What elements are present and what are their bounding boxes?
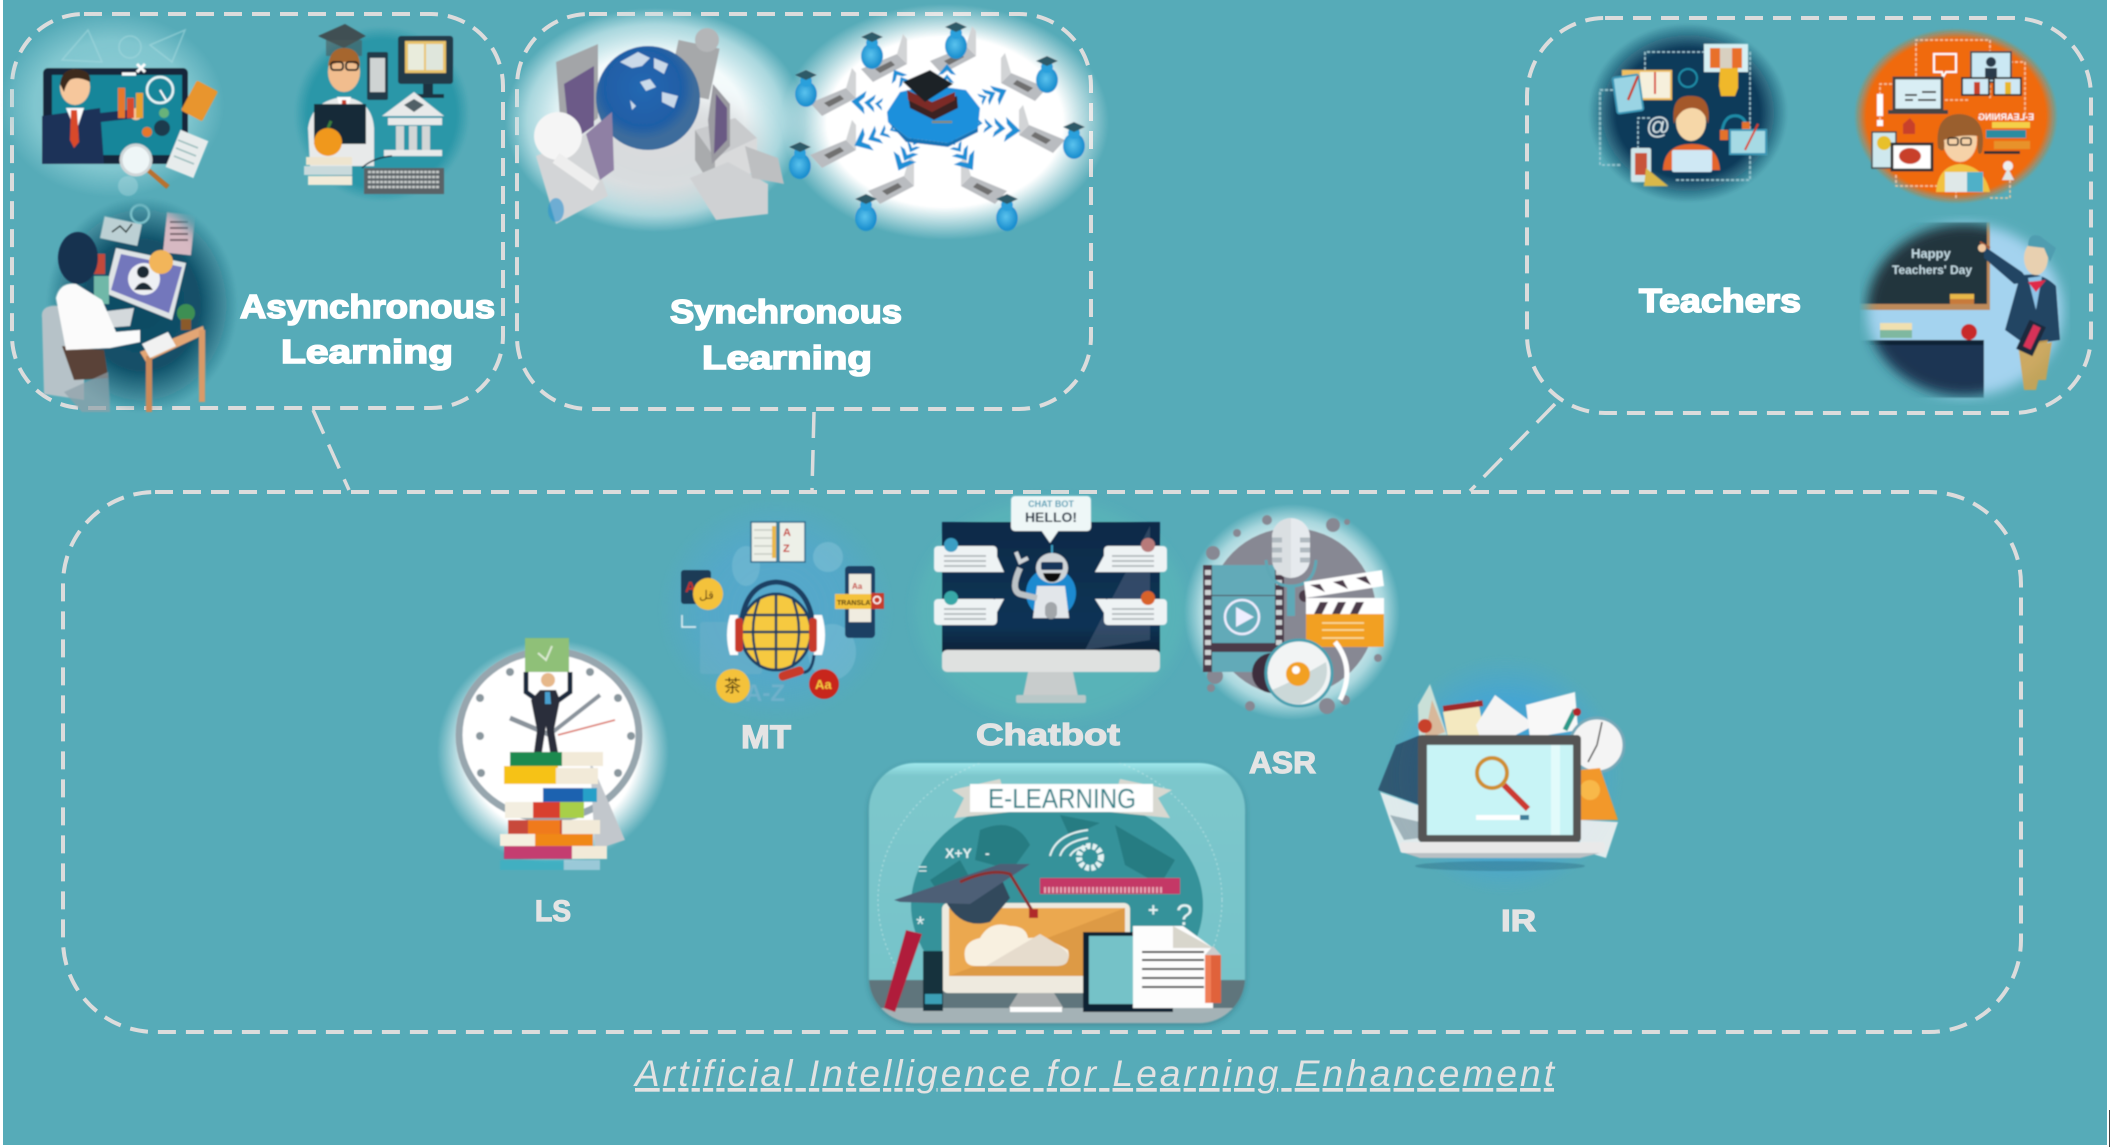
connector: synchronous to AI frame: [812, 412, 814, 490]
icon: information retrieval laptop: [1378, 655, 1624, 895]
icon: machine translation globe: [658, 498, 894, 722]
panel: E-Learning illustration: ?: [1176, 899, 1193, 932]
caption: Artificial Intelligence for Learning Enhancement: Artificial Intelligence for Learning Enhancement: [633, 1053, 1556, 1094]
icon: machine translation globe: A: [783, 527, 791, 539]
icon: online teacher with headset on navy: [1588, 23, 1788, 203]
panel: E-Learning illustration: *: [916, 912, 925, 937]
panel: artificial intelligence tools frame: [63, 492, 2021, 1032]
icon: chatbot on monitor: [916, 496, 1186, 720]
icon: speech recognition media: [1184, 504, 1400, 720]
label: ASR: ASR: [1249, 745, 1316, 780]
label: Chatbot: Chatbot: [976, 717, 1120, 752]
icon: machine translation globe: Z: [783, 543, 790, 555]
connector: asynchronous to AI frame: [313, 410, 349, 490]
panel: asynchronous learning frame: [12, 14, 503, 408]
panel: E-Learning illustration: -: [985, 845, 990, 861]
panel: E-Learning illustration: X+Y: [945, 845, 973, 861]
label: LS: LS: [535, 895, 571, 928]
heading: Teachers: Teachers: [1639, 282, 1801, 319]
icon: central hub with connected laptops: [781, 4, 1109, 240]
panel: synchronous learning frame: [517, 14, 1091, 409]
icon: online teacher with headset on navy: @: [1646, 113, 1670, 140]
panel: E-Learning illustration: E-LEARNING: [988, 783, 1136, 814]
icon: machine translation globe: A-Z: [745, 680, 785, 707]
icon: online teacher with headset on orange: [1854, 28, 2058, 204]
heading: Synchronous Learning line 2: Learning: [702, 339, 872, 376]
icon: machine translation globe: Aa: [685, 579, 705, 596]
icon: networked computers around globe: [505, 8, 805, 232]
panel: teachers frame: [1527, 18, 2091, 413]
panel: E-Learning illustration: +: [1148, 900, 1159, 920]
icon: teacher at blackboard: [1860, 215, 2070, 405]
label: IR: IR: [1501, 903, 1536, 938]
icon: teacher presenting at screen: [0, 13, 224, 197]
icon: learning styles clock and books: [437, 638, 669, 870]
icon: chatbot on monitor: HELLO!: [1025, 509, 1077, 525]
panel: E-Learning illustration: [866, 762, 1248, 1028]
icon: machine translation globe: TRANSLATE: [837, 600, 879, 607]
icon: machine translation globe: Aa: [852, 582, 863, 591]
heading: Synchronous Learning: Synchronous: [670, 293, 902, 330]
icon: machine translation globe: 茶: [724, 677, 741, 696]
heading: Asynchronous Learning line 2: Learning: [281, 333, 453, 370]
panel: E-Learning illustration: =: [918, 861, 927, 878]
icon: teacher at blackboard: Happy: [1911, 246, 1952, 261]
icon: machine translation globe: Aa: [815, 677, 832, 692]
icon: chatbot on monitor: CHAT BOT: [1028, 499, 1074, 509]
icon: teacher at blackboard: Teachers' Day: [1892, 263, 1972, 277]
icon: student at desk: [42, 197, 238, 413]
connector: teachers to AI frame: [1470, 404, 1555, 491]
label: MT: MT: [741, 719, 791, 755]
icon: online teacher with headset on orange: E-LEARNING: [1978, 112, 2034, 122]
heading: Asynchronous Learning: Asynchronous: [240, 288, 495, 325]
icon: graduate with devices and institution: [294, 24, 470, 202]
icon: machine translation globe: ﻗﻞ: [699, 588, 714, 602]
